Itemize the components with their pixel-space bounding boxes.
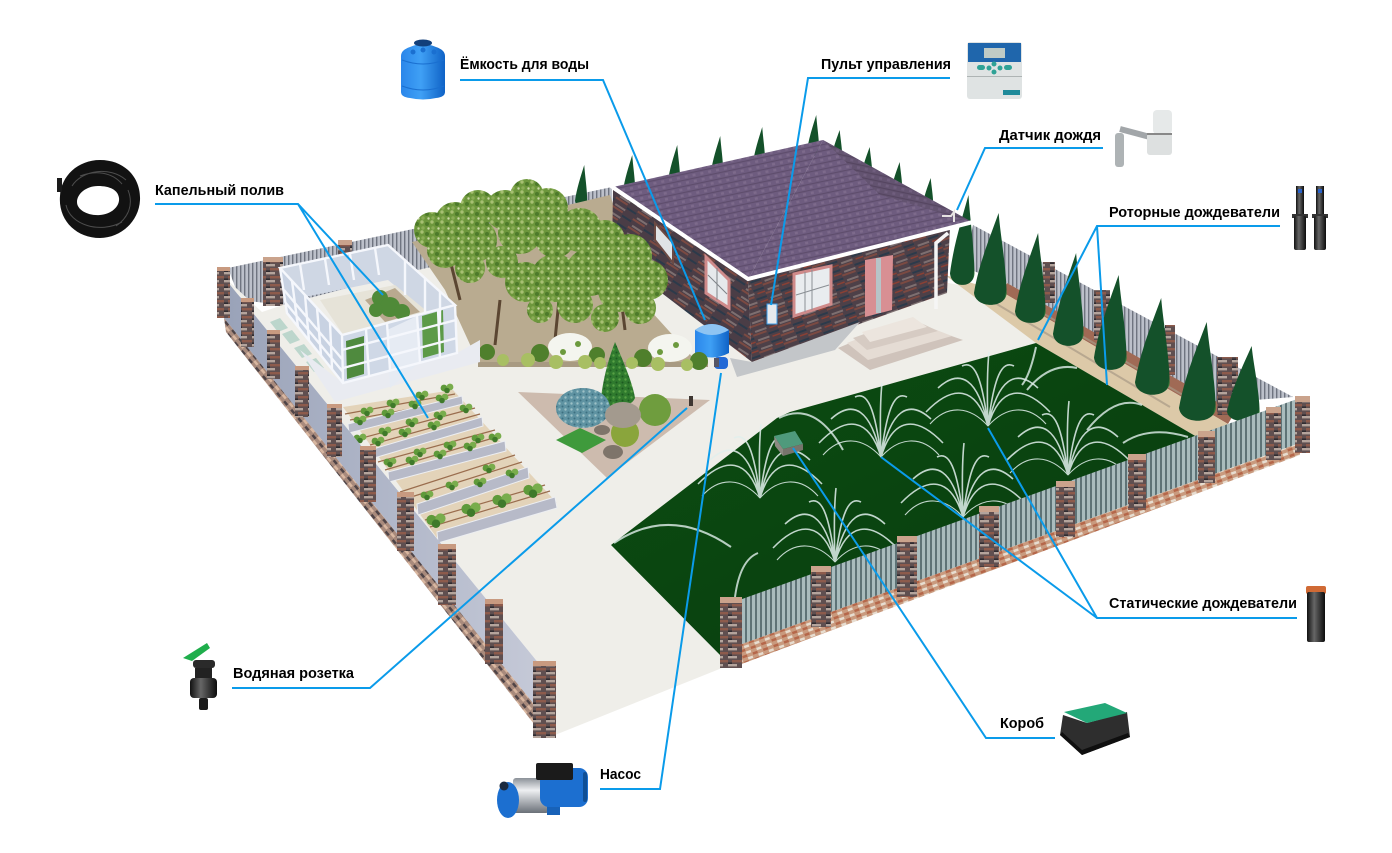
- fence footing: [731, 443, 1300, 668]
- rotary arcs: [614, 347, 1188, 597]
- seedlings: [354, 384, 543, 528]
- leader: rotary sprinklers: [1038, 226, 1280, 385]
- back-left fence: [228, 187, 612, 306]
- tan strip shadows: [990, 300, 1200, 407]
- leader: drip irrigation: [155, 204, 428, 418]
- raised bed edges: [348, 396, 557, 543]
- label: pump: Насос: [600, 767, 641, 783]
- static sprinklers: [698, 352, 1130, 562]
- house: [611, 140, 973, 377]
- label: valve box: Короб: [1000, 716, 1044, 732]
- glass stepping tiles: [270, 318, 336, 386]
- front fence: [720, 396, 1310, 668]
- steps: [838, 317, 963, 370]
- far left window: [655, 223, 673, 263]
- right fence pillars: [1043, 262, 1238, 415]
- icon: valve box: [1060, 703, 1130, 755]
- fence pillars: [720, 397, 1310, 668]
- icon: pump: [497, 763, 588, 818]
- pillar caps: [720, 396, 1310, 603]
- label: water socket: Водяная розетка: [233, 666, 355, 682]
- icon: drip hose coil: [57, 160, 140, 238]
- label: rain sensor: Датчик дождя: [999, 128, 1101, 144]
- greenhouse door: [387, 316, 420, 388]
- paved ground: [222, 225, 1040, 735]
- leader: valve box: [793, 448, 1055, 738]
- leader: water socket: [232, 408, 687, 688]
- left window: [706, 257, 729, 308]
- label: rotary sprinklers: Роторные дождеватели: [1109, 205, 1280, 221]
- icon: rotary sprinklers: [1292, 186, 1328, 250]
- icon: water tank: [401, 40, 445, 100]
- greenhouse lattice: [280, 245, 457, 383]
- house left wall: [612, 190, 752, 362]
- pump: [714, 357, 728, 369]
- house front wall: [748, 226, 950, 362]
- label: controller: Пульт управления: [821, 57, 951, 73]
- greenhouse plants: [369, 290, 410, 320]
- leader: pump: [600, 373, 721, 789]
- garden plot scene: [217, 115, 1310, 738]
- fence bars: [731, 398, 1300, 648]
- dark shrub at house corner: [618, 200, 637, 242]
- greenhouse left wall: [280, 268, 343, 383]
- wall controller: [767, 304, 777, 324]
- rain sensor on the roof: [942, 212, 954, 222]
- large garden trees: [414, 179, 668, 345]
- right fence brick band: [1002, 283, 1235, 424]
- icon: irrigation controller: [967, 42, 1022, 99]
- icon: water socket: [183, 643, 217, 710]
- icon: static sprinkler: [1306, 586, 1326, 642]
- left wall pillars: [217, 268, 556, 738]
- left wall panels: [222, 275, 545, 718]
- white hydrangeas: [548, 333, 692, 362]
- greenhouse floor and bed: [320, 285, 440, 345]
- label: drip irrigation: Капельный полив: [155, 183, 284, 199]
- greenhouse plinth: [300, 340, 480, 402]
- vegetable beds: [343, 384, 557, 543]
- greenhouse front wall: [342, 305, 457, 383]
- leader: controller: [771, 78, 950, 305]
- lawn: [611, 343, 1197, 657]
- water tank: [695, 324, 729, 358]
- greenhouse far walls: [280, 245, 455, 335]
- left pillar caps: [217, 267, 556, 666]
- leader lines: [155, 78, 1297, 789]
- leader: static sprinklers: [881, 428, 1297, 618]
- roof: [613, 140, 972, 280]
- greenhouse window plants: [346, 336, 364, 379]
- valve box on lawn: [774, 431, 803, 456]
- rock garden: [518, 342, 710, 478]
- front window: [794, 266, 831, 316]
- tan strip along the right fence: [945, 275, 1228, 437]
- gutters: [611, 186, 973, 279]
- brown earth under the garden trees: [412, 195, 697, 362]
- leader: rain sensor: [957, 148, 1103, 210]
- right row of cypress trees: [974, 213, 1260, 421]
- back row of cypress trees: [575, 115, 974, 285]
- house shadow: [730, 322, 860, 377]
- leader: water tank: [460, 80, 705, 320]
- greenhouse: [280, 245, 480, 402]
- downpipe: [936, 233, 948, 309]
- right fence: [965, 225, 1293, 403]
- label: static sprinklers: Статические дождеватели: [1109, 596, 1297, 612]
- shrub bed under the trees: [478, 333, 708, 371]
- left wall brick footing: [224, 318, 545, 738]
- label: water tank: Ёмкость для воды: [460, 56, 589, 73]
- icon: rain sensor: [1115, 110, 1172, 167]
- sprinkler spray: [614, 347, 1188, 597]
- door: [865, 255, 893, 317]
